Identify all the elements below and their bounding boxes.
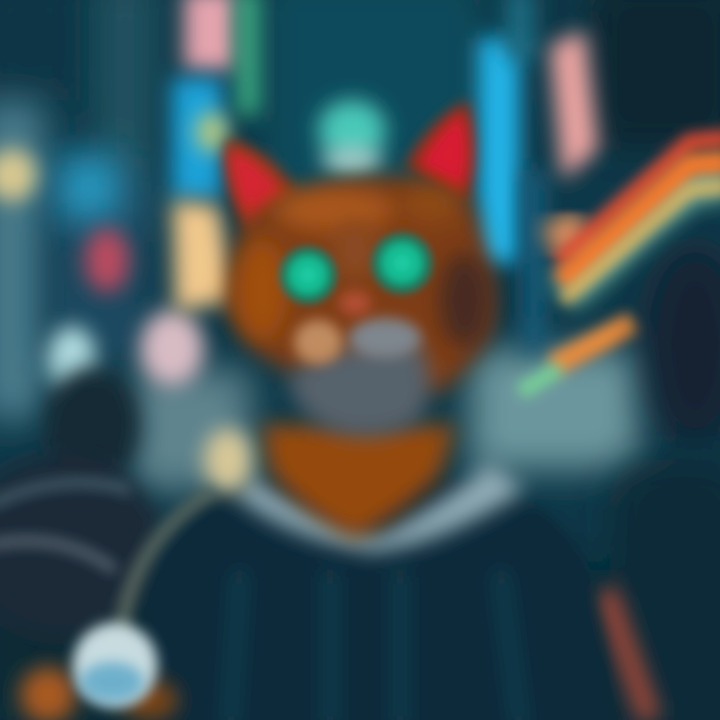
right ear bbox=[405, 100, 474, 205]
cat character bbox=[135, 100, 615, 720]
muzzle bbox=[294, 320, 342, 364]
cream patch near chest bbox=[204, 428, 252, 492]
raised arm sleeve bbox=[120, 490, 215, 640]
left signs bbox=[0, 149, 204, 394]
left eye bbox=[275, 242, 341, 308]
glow behind head bbox=[318, 100, 386, 174]
neck fur bbox=[262, 425, 455, 538]
background figure: left bbox=[0, 367, 162, 635]
face mask bbox=[289, 343, 430, 436]
head fur bbox=[225, 177, 493, 392]
right eye bbox=[367, 228, 437, 298]
background figure: right bbox=[605, 245, 720, 720]
neon sign: pink, blue and yellow column bbox=[172, 0, 260, 312]
left ear bbox=[225, 138, 300, 236]
nose bbox=[339, 291, 371, 315]
hoodie collar bbox=[235, 462, 525, 552]
hoodie body bbox=[135, 480, 615, 720]
fur highlights bbox=[275, 188, 395, 232]
held ball bbox=[20, 623, 178, 720]
hoodie seams bbox=[230, 570, 520, 720]
neon sign: cyan column and pink panel bbox=[478, 0, 598, 350]
rainbow stripes bbox=[520, 138, 720, 392]
